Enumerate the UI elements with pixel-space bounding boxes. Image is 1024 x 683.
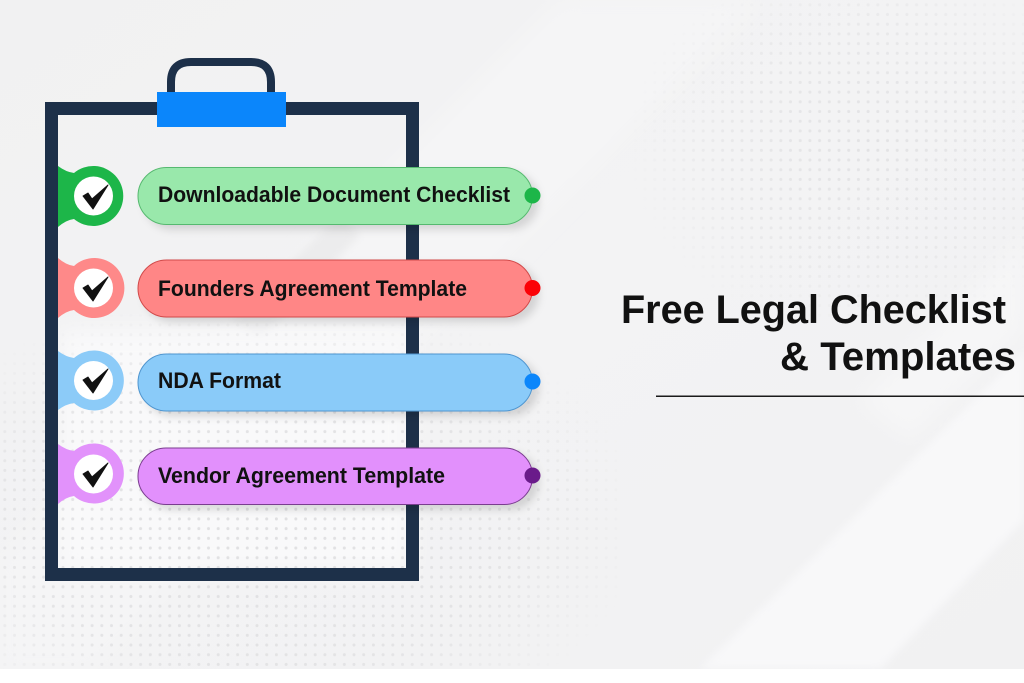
blue dot bbox=[524, 374, 540, 390]
clipboard board frame bbox=[52, 108, 412, 574]
title underline bbox=[656, 396, 1024, 397]
pill label bbox=[138, 354, 532, 411]
pill label bbox=[138, 168, 532, 224]
icon: red check badge bbox=[58, 258, 124, 318]
checklist item: NDA Format bbox=[58, 351, 540, 411]
pill label bbox=[138, 260, 532, 317]
pill label: Downloadable Document Checklist bbox=[158, 182, 511, 207]
clipboard handle bbox=[171, 62, 271, 93]
icon: purple check badge bbox=[58, 444, 124, 504]
icon: green check badge bbox=[58, 166, 123, 227]
pill label: Founders Agreement Template bbox=[158, 276, 467, 301]
title bbox=[621, 288, 1016, 379]
checklist item: Founders Agreement Template bbox=[58, 258, 540, 318]
pill label: Vendor Agreement Template bbox=[158, 463, 445, 488]
purple dot bbox=[524, 468, 540, 484]
title: Free Legal Checklist bbox=[621, 288, 1006, 332]
clipboard blue clip bbox=[157, 92, 286, 127]
icon: blue check badge bbox=[58, 351, 124, 410]
checklist item: Vendor Agreement Template bbox=[58, 444, 540, 504]
title: & Templates bbox=[780, 335, 1016, 379]
pill label bbox=[138, 448, 532, 504]
red dot bbox=[524, 280, 540, 296]
clipboard bbox=[52, 62, 412, 574]
checklist item: Downloadable Document Checklist bbox=[58, 166, 540, 227]
pill label: NDA Format bbox=[158, 368, 282, 393]
green dot bbox=[524, 188, 540, 204]
